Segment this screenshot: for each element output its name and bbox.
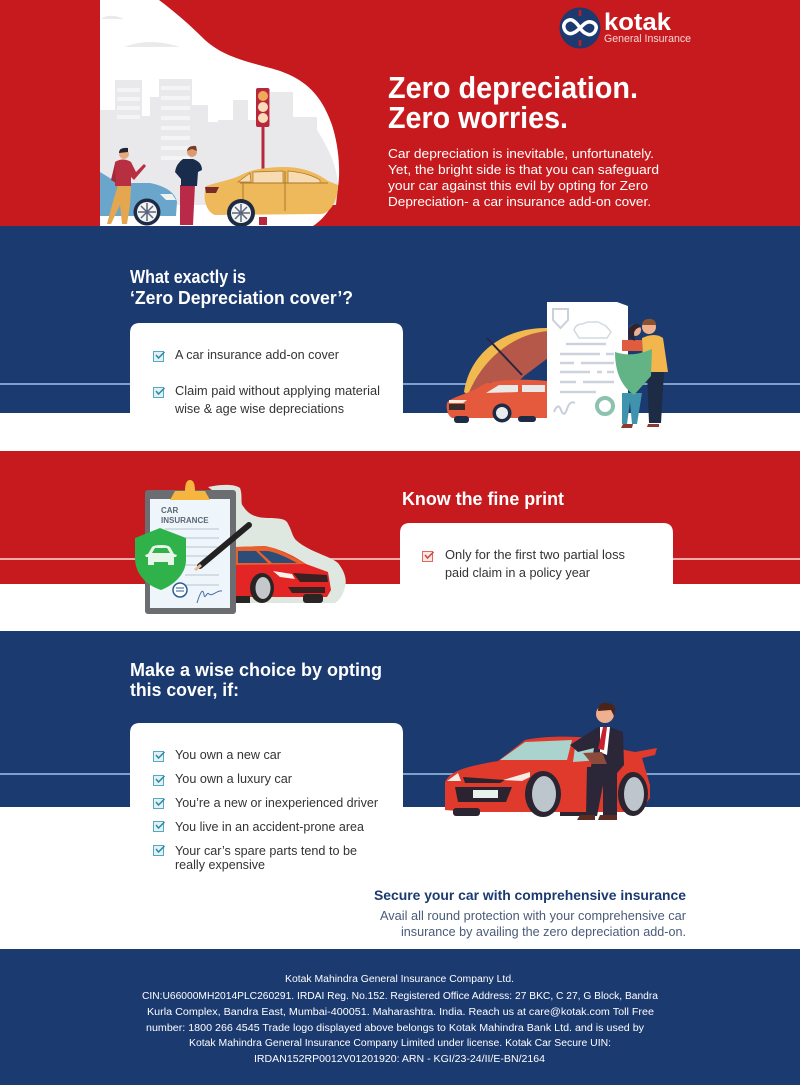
card text: Only for the first two partial loss <box>445 548 625 562</box>
list text: Claim paid without applying material <box>175 384 380 398</box>
callout: secure your car: insurance by availing the zero depreciation add-on. <box>401 925 686 939</box>
heading: Know the fine print <box>402 489 564 509</box>
heading: Make a wise choice by opting <box>130 660 382 680</box>
title <box>388 70 638 135</box>
footer: Kurla Complex, Bandra East, Mumbai-400051. Maharashtra. India. Reach us at care@kotak.com Toll Free <box>147 1007 654 1018</box>
panel: fine print <box>0 451 800 614</box>
list text: You’re a new or inexperienced driver <box>175 796 378 810</box>
heading: this cover, if: <box>130 680 239 700</box>
list text <box>175 748 378 872</box>
card: fine print <box>400 523 673 584</box>
list text: wise & age wise depreciations <box>174 402 344 416</box>
heading: What exactly is <box>130 267 246 287</box>
footer <box>0 949 800 1085</box>
callout: secure your car <box>374 887 686 939</box>
policy document <box>541 302 628 428</box>
check icon <box>154 388 164 398</box>
panel: hero <box>0 0 800 227</box>
clipboard: INSURANCE <box>161 516 209 525</box>
blue car <box>100 172 177 226</box>
clipboard: CAR <box>161 506 179 515</box>
footer: CIN:U66000MH2014PLC260291. IRDAI Reg. No.152. Registered Office Address: 27 BKC, C 27, G Block, Bandra <box>142 991 658 1002</box>
illustration: umbrella, policy and couple <box>447 302 668 428</box>
worried person <box>175 146 202 225</box>
person with phone <box>107 148 146 224</box>
check icon <box>154 352 164 362</box>
illustration: sports car and man <box>445 703 657 820</box>
check icon <box>422 552 434 562</box>
yellow car <box>205 167 338 227</box>
green shield <box>135 528 186 590</box>
check icons <box>154 752 164 856</box>
heading: ‘Zero Depreciation cover’? <box>130 288 353 308</box>
list text <box>174 348 380 416</box>
illustration: accident scene <box>100 0 339 227</box>
footer: Kotak Mahindra General Insurance Company Limited under license. Kotak Car Secure UIN: <box>189 1038 611 1049</box>
list text: A car insurance add-on cover <box>175 348 339 362</box>
couple with shield <box>615 319 668 428</box>
logo: General Insurance <box>604 33 691 45</box>
list text: You own a luxury car <box>175 772 292 786</box>
traffic light <box>256 88 270 170</box>
callout: secure your car: Avail all round protection with your comprehensive car <box>380 909 686 923</box>
list text: You live in an accident-prone area <box>175 820 364 834</box>
clipboard <box>145 480 236 614</box>
callout: secure your car: Secure your car with comprehensive insurance <box>374 887 686 903</box>
card text <box>445 548 625 580</box>
card: reasons list <box>130 723 403 885</box>
panel: wise choice <box>0 631 800 885</box>
intro text <box>388 146 659 209</box>
intro text: your car against this evil by opting for Zero <box>388 178 648 193</box>
logo: kotak <box>604 9 672 36</box>
man in suit <box>570 703 624 820</box>
title: Zero worries. <box>388 100 568 135</box>
panel: what is zero depreciation <box>0 226 800 428</box>
red car <box>236 546 331 603</box>
footer: IRDAN152RP0012V01201920: ARN - KGI/23-24/II/E-BN/2164 <box>254 1054 545 1065</box>
heading <box>130 660 382 700</box>
red car <box>447 380 547 423</box>
intro text: Car depreciation is inevitable, unfortunately. <box>388 146 654 161</box>
card text: paid claim in a policy year <box>445 566 590 580</box>
list text: Your car’s spare parts tend to be <box>175 844 357 858</box>
intro text: Depreciation- a car insurance add-on cover. <box>388 194 651 209</box>
list text: You own a new car <box>175 748 281 762</box>
card: definition list <box>130 323 403 416</box>
footer: Kotak Mahindra General Insurance Company Ltd. <box>285 974 514 985</box>
pen <box>195 525 249 570</box>
red sports car <box>445 737 657 817</box>
intro text: Yet, the bright side is that you can safeguard <box>388 162 659 177</box>
logo <box>560 8 691 48</box>
heading <box>130 267 353 308</box>
footer: number: 1800 266 4545 Trade logo displayed above belongs to Kotak Mahindra Bank Ltd. and is used by <box>146 1023 644 1034</box>
illustration: insurance clipboard <box>135 480 346 614</box>
list text: really expensive <box>175 858 265 872</box>
title: Zero depreciation. <box>388 70 638 105</box>
